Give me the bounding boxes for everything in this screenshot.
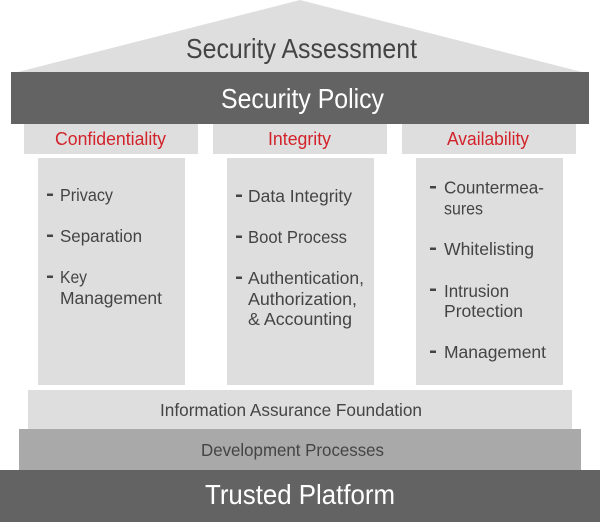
pillar: availability items: Management xyxy=(444,342,546,362)
pillar: availability items: sures xyxy=(444,198,483,218)
pillar: integrity items: & Accounting xyxy=(248,309,352,329)
pillar header: confidentiality xyxy=(24,124,198,154)
pillar header: availability: Availability xyxy=(447,129,529,149)
pillar: integrity items: Boot Process xyxy=(248,227,347,247)
layer: information assurance foundation: Information Assurance Foundation xyxy=(160,400,422,420)
base: trusted platform: Trusted Platform xyxy=(205,479,395,510)
layer: development processes: Development Processes xyxy=(201,440,384,460)
pillar: confidentiality items: Separation xyxy=(60,226,142,246)
base: trusted platform xyxy=(0,470,600,522)
pillar: integrity items: Authentication, xyxy=(248,268,364,288)
layer: development processes xyxy=(19,429,581,470)
pillar header: integrity: Integrity xyxy=(268,129,331,149)
pillar: availability items: Protection xyxy=(444,301,523,321)
pillar header: confidentiality: Confidentiality xyxy=(55,129,166,149)
pillar: integrity items: Data Integrity xyxy=(248,186,352,206)
pillar: availability items: Whitelisting xyxy=(444,239,534,259)
pillar: integrity items xyxy=(227,158,374,385)
pillar: availability items: Intrusion xyxy=(444,281,509,301)
pillar: confidentiality items: Management xyxy=(60,288,162,308)
bar: security policy: Security Policy xyxy=(221,83,384,114)
layer: information assurance foundation xyxy=(28,390,572,429)
roof: security assessment: Security Assessment xyxy=(186,33,417,64)
roof: security assessment xyxy=(18,0,582,72)
pillar: availability items xyxy=(416,158,563,385)
pillar: confidentiality items xyxy=(38,158,185,385)
bar: security policy xyxy=(11,72,589,124)
pillar: confidentiality items: Privacy xyxy=(60,185,113,205)
pillar: integrity items: Authorization, xyxy=(248,289,357,309)
pillar header: integrity xyxy=(213,124,387,154)
pillar: confidentiality items: Key xyxy=(60,267,87,287)
pillar: availability items: Countermea- xyxy=(444,178,544,198)
pillar header: availability xyxy=(402,124,576,154)
